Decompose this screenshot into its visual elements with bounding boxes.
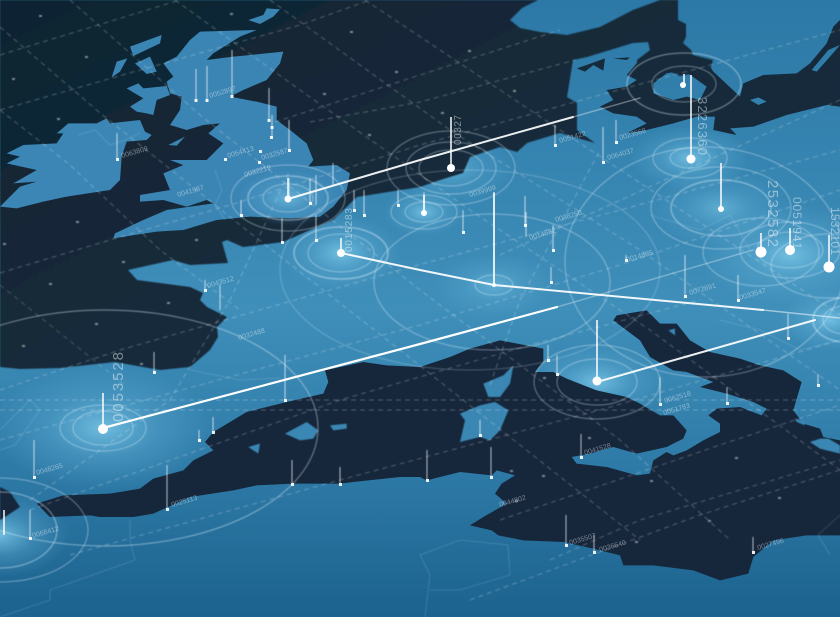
labels: tilted small numbers: 0041528: [584, 443, 612, 457]
light glows over the continent: [0, 126, 840, 577]
labels: tilted small numbers: 0032488: [238, 328, 266, 342]
link: Spain to Germany: [103, 307, 557, 428]
sea: small Danish islets: [577, 57, 630, 72]
land: Great Britain: [112, 8, 350, 238]
labels: tilted small numbers: 0033547: [739, 288, 767, 302]
pins: thin vertical markers: [30, 50, 818, 552]
link lines between hubs: [103, 98, 840, 428]
pin feet: small square dots: [29, 95, 820, 554]
labels: tilted small numbers: 0062518: [664, 391, 692, 405]
sea: North Atlantic and North Sea (dark): [0, 0, 713, 370]
labels: tilted small numbers: 0068412: [32, 526, 60, 540]
land: Mediterranean islands: [248, 329, 840, 454]
land: Aegean and Greek islands: [668, 329, 840, 454]
labels: large vertical numbers: 0015283: [344, 208, 355, 252]
labels: tilted small numbers: 0044802: [499, 495, 527, 509]
labels: tilted small numbers: 0027496: [757, 538, 785, 552]
land: Ireland: [0, 118, 152, 208]
link: Italy to east: [597, 320, 815, 382]
link: Britain to North Sea: [288, 117, 573, 199]
labels: large vertical numbers: 00327: [453, 115, 464, 145]
glow: Britain hub over land and sea: [238, 170, 338, 226]
land: Corsica: [483, 365, 513, 397]
labels: large vertical numbers: 0051941: [790, 197, 804, 249]
labels: tilted small numbers: 0035507: [569, 533, 597, 547]
labels: tilted small numbers: 0014895: [626, 250, 654, 264]
labels: tilted small numbers: [32, 86, 785, 554]
sea: Baltic and Danish straits (dark): [577, 20, 840, 135]
labels: tilted small numbers: 0043512: [207, 276, 235, 290]
land: Scottish islands: [112, 8, 280, 146]
labels: tilted small numbers: 0041987: [177, 185, 205, 199]
sea: Gibraltar fragment: [0, 487, 20, 520]
labels: tilted small numbers: 0051422: [559, 131, 587, 145]
link: France through central hub: [341, 253, 763, 310]
labels: tilted small numbers: 0052897: [209, 86, 237, 100]
country borders: [0, 130, 840, 617]
labels: tilted small numbers: 0014682: [529, 228, 557, 242]
labels: large vertical numbers: 2532582: [764, 180, 781, 247]
labels: tilted small numbers: 0072691: [689, 283, 717, 297]
labels: tilted small numbers: 0063809: [121, 146, 149, 160]
hub stems: thick vertical markers: [4, 74, 829, 535]
hub dots: [98, 82, 834, 434]
sea: Mediterranean (dark): [37, 310, 840, 580]
labels: large vertical numbers: [110, 97, 840, 422]
land: Sardinia: [460, 402, 508, 442]
labels: tilted small numbers: 0038250: [555, 210, 583, 224]
labels: tilted small numbers: 0048265: [36, 463, 64, 477]
labels: large vertical numbers: 3226360: [695, 97, 710, 155]
labels: tilted small numbers: 0032219: [244, 165, 272, 179]
labels: tilted small numbers: 0036640: [599, 540, 627, 554]
labels: tilted small numbers: 0051783: [663, 403, 691, 417]
labels: tilted small numbers: 0054413: [227, 146, 255, 160]
labels: tilted small numbers: 0064037: [607, 148, 635, 162]
link: central hub vertical: [493, 193, 495, 285]
land: Balearic islands: [248, 422, 347, 454]
labels: tilted small numbers: 0025113: [171, 495, 198, 509]
labels: tilted small numbers: 0032587: [261, 148, 289, 162]
labels: tilted small numbers: 0039999: [469, 185, 497, 199]
specks: small dots on the dark sea: [3, 13, 781, 543]
labels: tilted small numbers: 0023568: [619, 128, 647, 142]
labels: large vertical numbers: 0053528: [110, 352, 127, 422]
